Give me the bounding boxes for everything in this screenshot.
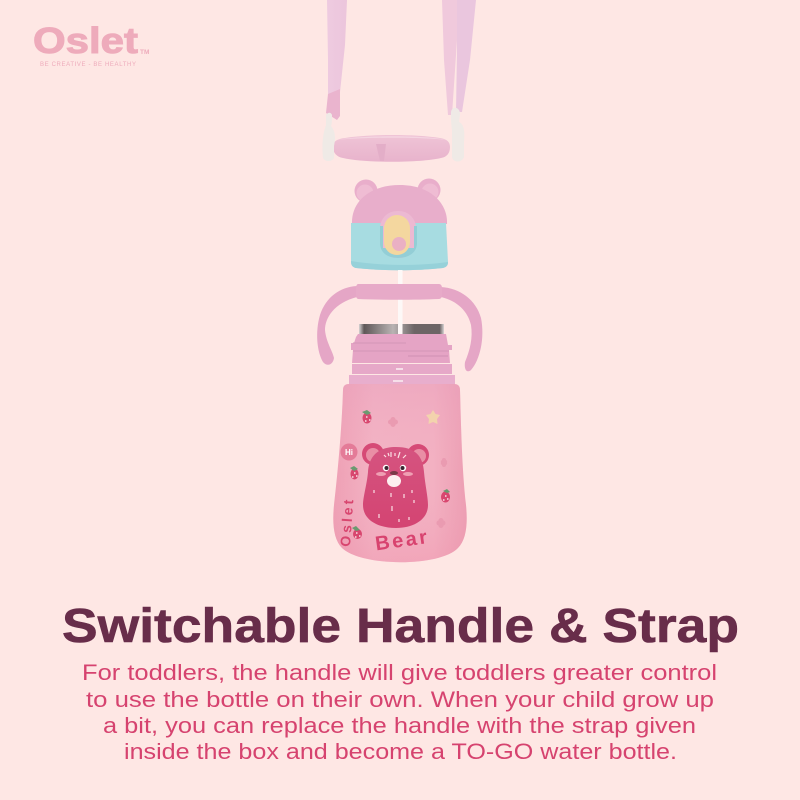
clover decorations: [388, 417, 447, 528]
speech bubble Hi: Hi: [345, 448, 353, 457]
bottle brand mark: Oslet: [337, 499, 356, 547]
left strap buckle: [326, 89, 340, 120]
logo: Oslet: Oslet: [33, 20, 138, 61]
left ear: [354, 180, 378, 202]
yellow slider: [384, 215, 410, 255]
left arm: [317, 286, 357, 365]
neck: [349, 334, 455, 385]
logo: Oslet: [33, 20, 149, 68]
right arm: [441, 287, 482, 371]
speech bubble Hi: [340, 444, 358, 460]
description text: [82, 660, 717, 764]
product: handle: [317, 284, 482, 371]
logo: Oslet: TM: [140, 49, 149, 56]
slider dot: [392, 237, 406, 251]
title: Switchable Handle & Strap: [62, 600, 739, 653]
product: straw: [398, 270, 402, 334]
dome: [352, 185, 447, 224]
right ear: [418, 178, 440, 202]
teal band: [351, 223, 448, 270]
neck lower step: [349, 375, 455, 385]
product: bottle: [333, 334, 467, 562]
button surround: [380, 211, 416, 258]
right strap outer band: [456, 0, 476, 112]
product: steel rim: [359, 324, 444, 334]
left strap: [327, 0, 347, 96]
product: bear lid: [351, 178, 448, 270]
right clip: [451, 108, 464, 162]
star: [426, 410, 440, 424]
right strap inner band: [442, 0, 457, 115]
left clip: [322, 113, 335, 161]
product: strap attachment: [322, 0, 476, 162]
description text: For toddlers, the handle will give toddlers greater control: [82, 660, 717, 685]
description text: a bit, you can replace the handle with the strap given: [103, 713, 696, 738]
description text: inside the box and become a TO-GO water bottle.: [124, 739, 677, 764]
description text: to use the bottle on their own. When your child grow up: [86, 687, 714, 712]
bear illustration: [362, 443, 429, 528]
strap ring: [333, 135, 450, 162]
strawberries: [350, 410, 450, 539]
logo: Oslet: BE CREATIVE - BE HEALTHY: [40, 62, 136, 68]
neck step: [352, 364, 452, 374]
bear label: Bear: [374, 526, 429, 555]
body: [333, 384, 467, 562]
collar: [356, 284, 442, 300]
